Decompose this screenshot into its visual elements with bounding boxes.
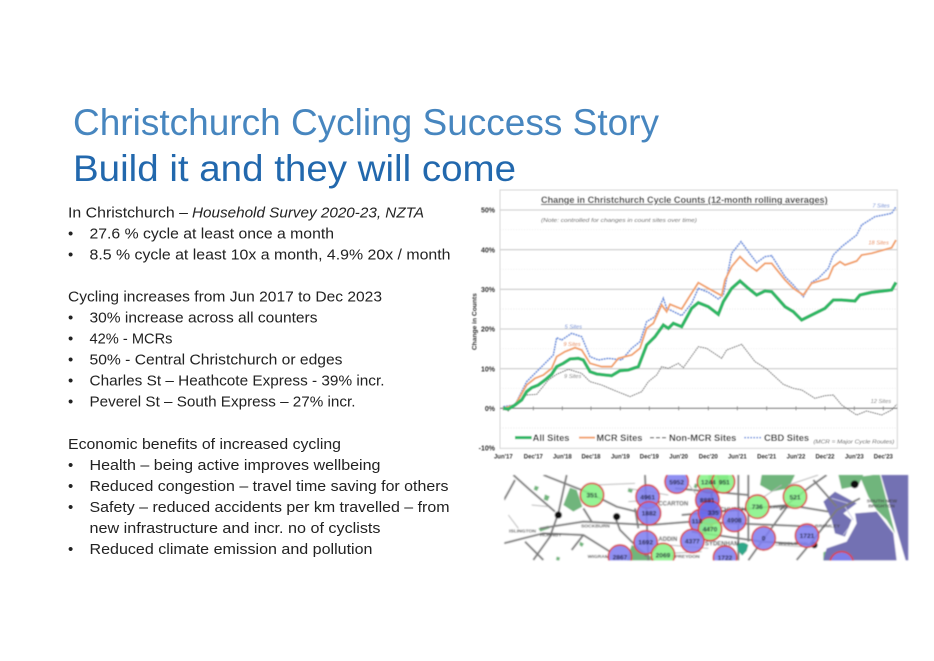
place names: HORNBY [540, 532, 562, 538]
y axis labels: 10% [481, 366, 496, 373]
y axis labels [479, 208, 496, 453]
counter values: 4961 [640, 494, 655, 501]
series: non-MCR sites [503, 344, 897, 415]
counter values: 5952 [669, 479, 684, 486]
benefits bullet 1: • [68, 457, 73, 474]
counter values: 1882 [642, 511, 657, 518]
y axis labels: 0% [485, 406, 496, 413]
place names: ADDIN [658, 537, 677, 543]
map: cycle counter locations [503, 474, 910, 562]
survey bullet 2: 8.5 % cycle at least 10x a month, 4.9% 20x / month [90, 246, 451, 264]
survey bullet 1: • [68, 226, 73, 242]
increases bullet 3: 50% - Central Christchurch or edges [90, 352, 342, 368]
counter values: 4377 [685, 538, 700, 545]
increases bullet 4: Charles St – Heathcote Express - 39% incr. [90, 372, 384, 390]
x axis labels: Dec'20 [699, 454, 719, 460]
x axis labels: Jun'19 [611, 454, 630, 460]
survey heading: In Christchurch – [68, 204, 189, 222]
counter values: 118 [692, 519, 703, 526]
x axis labels: Jun'21 [728, 454, 747, 460]
parks [534, 475, 895, 561]
x axis labels [494, 454, 894, 460]
y axis labels: 30% [481, 287, 496, 294]
series labels: 12 Sites [871, 399, 891, 405]
benefits bullet 3: • [68, 499, 73, 516]
benefits bullet 3: Safety – reduced accidents per km travelled – from [90, 499, 450, 516]
text block: household survey [68, 204, 451, 264]
counter values: 1721 [800, 533, 815, 540]
place names: CHURCH [720, 508, 746, 514]
place names: SPREYDON [672, 554, 700, 560]
legend: All Sites [533, 433, 569, 443]
counter values: 8881 [700, 497, 715, 504]
counter circles [578, 474, 854, 562]
estuary channel [832, 498, 853, 535]
water [823, 475, 908, 560]
counter values: 0 [762, 536, 766, 543]
benefits bullet 2: • [68, 478, 73, 495]
place names: BROMLEY [815, 523, 841, 529]
place names: BRIGHTON [868, 503, 895, 509]
title line 2: Build it and they will come [73, 148, 516, 189]
y axis labels: 40% [481, 247, 496, 254]
benefits heading: Economic benefits of increased cycling [68, 436, 341, 453]
benefits bullet 1: Health – being active improves wellbeing [90, 457, 381, 474]
increases bullet 1: 30% increase across all counters [90, 310, 318, 326]
y axis labels: 50% [481, 208, 496, 215]
place names: LINWOOD [770, 504, 794, 510]
increases bullet 1: • [68, 310, 73, 326]
title [73, 102, 659, 189]
chart note: (Note: controlled for changes in count sites over time) [541, 218, 697, 224]
chart title: Change in Christchurch Cycle Counts (12-month rolling averages) [541, 195, 828, 205]
benefits bullet 4: • [68, 541, 73, 558]
benefits bullet 3 continuation: new infrastructure and incr. no of cyclists [90, 520, 380, 537]
increases heading: Cycling increases from Jun 2017 to Dec 2023 [68, 288, 382, 306]
place names: ISLINGTON [509, 528, 536, 534]
counter values: 2069 [656, 552, 671, 559]
place names: WOOLSTON [778, 541, 808, 547]
benefits bullet 2: Reduced congestion – travel time saving for others [90, 478, 448, 495]
survey heading: Household Survey 2020-23, NZTA [192, 204, 424, 222]
counter values: 521 [789, 494, 801, 501]
road shields [555, 480, 859, 548]
x axis labels: Jun'23 [845, 454, 864, 460]
increases bullet 2: • [68, 330, 73, 348]
counter values: 1692 [638, 540, 653, 547]
place names: SOUTH NEW [867, 498, 897, 504]
place names [509, 498, 897, 560]
survey bullet 2: • [68, 246, 73, 264]
x axis labels: Jun'17 [494, 454, 513, 460]
legend: Non-MCR Sites [669, 433, 736, 443]
counter values: 4908 [727, 517, 742, 524]
y axis title: Change in Counts [471, 293, 478, 350]
x axis labels: Dec'17 [524, 454, 544, 460]
series labels: 18 Sites [868, 240, 889, 246]
legend: (MCR = Major Cycle Routes) [813, 439, 894, 445]
y axis labels: -10% [479, 446, 496, 453]
counter values: 335 [708, 510, 719, 517]
x axis labels: Dec'23 [874, 454, 894, 460]
series labels: 9 Sites [564, 374, 581, 380]
x axis labels: Dec'19 [640, 454, 660, 460]
text block: economic benefits [68, 436, 450, 558]
increases bullet 2: 42% - MCRs [90, 330, 172, 348]
counter values: 1722 [718, 555, 733, 562]
counter values: 351 [586, 492, 598, 499]
teal marker [737, 542, 748, 556]
series labels: 5 Sites [565, 324, 582, 330]
benefits bullet 4: Reduced climate emission and pollution [90, 541, 372, 558]
series labels: 9 Sites [563, 342, 581, 348]
counter values: 951 [719, 479, 730, 486]
counter values: 736 [752, 504, 763, 511]
line chart: change in cycle counts [471, 190, 897, 460]
counter values: 4470 [703, 526, 718, 533]
increases bullet 5: Peverel St – South Express – 27% incr. [90, 394, 356, 410]
increases bullet 5: • [68, 394, 73, 410]
y axis labels: 20% [481, 327, 496, 334]
text block: cycling increases [68, 288, 384, 410]
counter values: 2867 [613, 554, 628, 561]
place names: SYDENHAM [705, 541, 739, 547]
place names: SOCKBURN [581, 524, 610, 530]
x axis labels: Dec'22 [815, 454, 835, 460]
increases bullet 3: • [68, 352, 73, 368]
legend: CBD Sites [764, 433, 809, 443]
x axis labels: Jun'22 [787, 454, 806, 460]
title line 1: Christchurch Cycling Success Story [73, 102, 659, 143]
x axis labels: Dec'21 [757, 454, 777, 460]
x axis labels: Jun'20 [669, 454, 689, 460]
legend [515, 433, 894, 445]
x axis labels: Dec'18 [581, 454, 601, 460]
series: all sites [503, 281, 896, 409]
counter values: 1244 [701, 479, 716, 486]
legend: MCR Sites [596, 433, 642, 443]
counter values [586, 479, 815, 562]
series: CBD sites [503, 207, 896, 407]
series labels [563, 204, 891, 405]
increases bullet 4: • [68, 372, 73, 390]
place names: WIGRAM [588, 554, 609, 560]
x axis labels: Jun'18 [553, 454, 572, 460]
survey bullet 1: 27.6 % cycle at least once a month [90, 226, 334, 242]
series labels: 7 Sites [872, 204, 890, 210]
series: MCR sites [503, 240, 896, 408]
roads [504, 475, 860, 560]
place names: CCARTON [658, 502, 688, 508]
